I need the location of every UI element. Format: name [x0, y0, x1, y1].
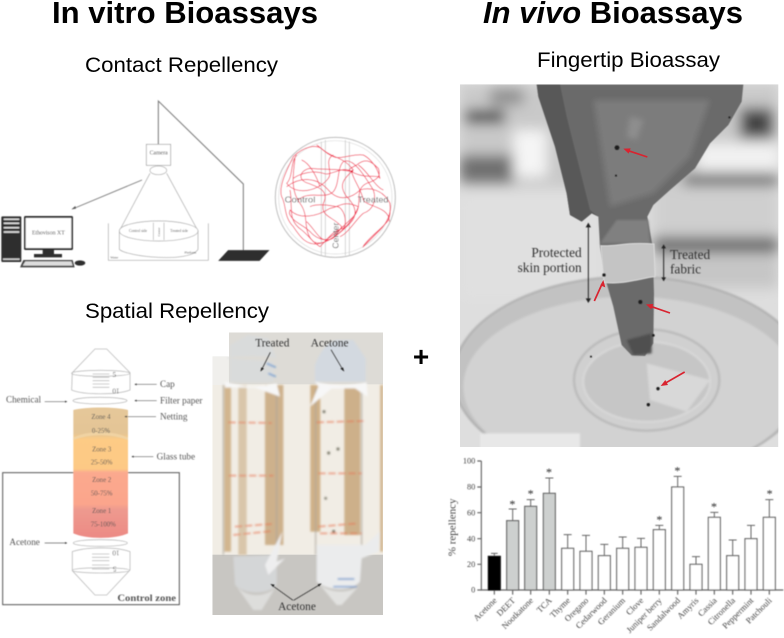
heading: Spatial Repellency: Spatial Repellency	[85, 299, 269, 323]
black dimension arrows and labels	[518, 223, 711, 303]
x axis labels: DEET	[494, 595, 518, 618]
bottom cap	[72, 548, 130, 595]
black dimension arrows and labels: Protected	[531, 245, 582, 260]
glass tube zones: 0-25%	[92, 428, 110, 435]
x axis labels: Juniper berry	[624, 595, 664, 635]
x axis labels: TCA	[534, 595, 554, 615]
bottom cap: 5	[113, 565, 117, 574]
x axis labels: Cedarwood	[573, 595, 609, 631]
x axis labels: Citronella	[706, 595, 737, 627]
x axis labels: Amyris	[675, 595, 701, 621]
camera field of view and platform: Water	[110, 255, 119, 259]
right acetone tube	[310, 340, 380, 605]
glass tube zones: Zone 3	[92, 446, 112, 453]
black dimension arrows and labels: fabric	[670, 262, 701, 277]
glass tube zones: 75-100%	[91, 522, 116, 529]
y axis labels: 60	[467, 508, 475, 517]
filter paper disc	[73, 397, 127, 404]
camera field of view and platform	[108, 173, 208, 260]
red arrows	[594, 148, 685, 386]
treated fabric wrap	[601, 243, 655, 283]
annotation text and arrows	[255, 338, 349, 613]
heading: Fingertip Bioassay: Fingertip Bioassay	[537, 48, 720, 72]
petri dish	[460, 276, 778, 447]
top cap: 5	[112, 370, 116, 379]
annotation text and arrows: Acetone	[311, 338, 349, 350]
insects	[590, 116, 730, 406]
camera field of view and platform: Treated side	[170, 229, 188, 233]
y axis labels: 80	[467, 483, 475, 492]
annotation text and arrows: Treated	[255, 338, 290, 350]
photo background	[212, 332, 383, 555]
camera field of view and platform: Platform	[185, 251, 197, 255]
icon: computer: Ethovison XT	[32, 230, 65, 236]
black dimension arrows and labels: Treated	[670, 247, 711, 262]
significance stars	[509, 464, 773, 526]
glass tube zones: Zone 1	[92, 508, 111, 515]
significance stars: *	[711, 500, 717, 514]
chart: arena track plot: Treated	[358, 194, 389, 204]
y axis labels: 0	[471, 586, 475, 595]
camera field of view and platform: Center	[157, 227, 161, 236]
panel: contact repellency diagram	[1, 101, 395, 267]
labels with arrows: Netting	[160, 411, 188, 421]
x axis labels: Sandalwood	[645, 595, 683, 633]
x axis labels: Geranium	[596, 595, 627, 627]
x axis labels: Nootkatone	[499, 595, 535, 631]
x axis labels: Clove	[624, 595, 646, 617]
glass tube zones: Zone 4	[91, 414, 111, 421]
hand and finger	[537, 84, 743, 356]
x axis labels: Acetone	[471, 595, 499, 623]
labels with arrows: Control zone	[117, 593, 176, 603]
camera field of view and platform: Control side	[129, 229, 147, 233]
chart: arena track plot: Center	[330, 223, 340, 249]
panel: spatial repellency photograph	[212, 332, 383, 615]
cardboard backing strips	[224, 385, 231, 552]
glass tube zones: 25-50%	[91, 459, 113, 466]
significance stars: *	[767, 487, 773, 501]
plus sign: +	[413, 341, 429, 372]
significance stars: *	[546, 465, 552, 479]
chart: arena track plot	[275, 137, 395, 257]
acetone disc	[73, 540, 127, 546]
bottom cap: 10	[112, 549, 120, 558]
significance stars: *	[509, 497, 515, 511]
panel: fingertip bioassay photograph	[460, 84, 778, 447]
labels with arrows: Cap	[160, 379, 175, 389]
icon: computer	[1, 216, 85, 267]
y axis labels: 20	[467, 560, 475, 569]
annotation text and arrows: Acetone	[278, 601, 316, 613]
camera: Camera	[150, 151, 168, 157]
x axis labels: Thyme	[548, 595, 572, 620]
labels with arrows: Filter paper	[160, 395, 202, 405]
glass tube zones: Zone 2	[92, 477, 112, 484]
labels with arrows: Acetone	[9, 537, 40, 547]
glass tube zones: 50-75%	[91, 491, 113, 498]
x axis labels	[471, 595, 774, 635]
labels with arrows: Glass tube	[157, 451, 195, 461]
camera stand	[158, 101, 268, 260]
control zone box	[3, 473, 179, 605]
significance stars: *	[656, 512, 662, 526]
glass tube zones	[73, 407, 128, 538]
labels with arrows	[6, 379, 202, 603]
x axis labels: Oregano	[562, 595, 590, 623]
axes and ticks	[477, 461, 783, 595]
heading: Contact Repellency: Contact Repellency	[85, 53, 278, 77]
y axis labels: 100	[463, 457, 475, 466]
y axis labels	[463, 457, 475, 595]
x axis labels: Peppermint	[720, 595, 756, 631]
panel: spatial repellency diagram	[3, 349, 202, 605]
left treated tube	[223, 335, 285, 610]
x axis labels: Patchouli	[744, 595, 774, 626]
y axis labels: 40	[467, 534, 475, 543]
arrow to computer	[71, 180, 142, 209]
significance stars: *	[528, 487, 534, 501]
top cap: 10	[112, 386, 120, 395]
error bars	[491, 476, 773, 564]
black dimension arrows and labels: skin portion	[518, 260, 582, 275]
bar chart: % repellency	[446, 457, 783, 635]
camera	[146, 144, 171, 175]
chart: arena track plot: Control	[285, 194, 315, 204]
photo background	[460, 84, 778, 447]
labels with arrows: Chemical	[6, 394, 42, 404]
y axis title: % repellency	[446, 498, 458, 556]
significance stars: *	[674, 464, 680, 478]
top cap	[72, 349, 130, 395]
x axis labels: Cassia	[696, 595, 719, 618]
bars	[488, 487, 775, 590]
